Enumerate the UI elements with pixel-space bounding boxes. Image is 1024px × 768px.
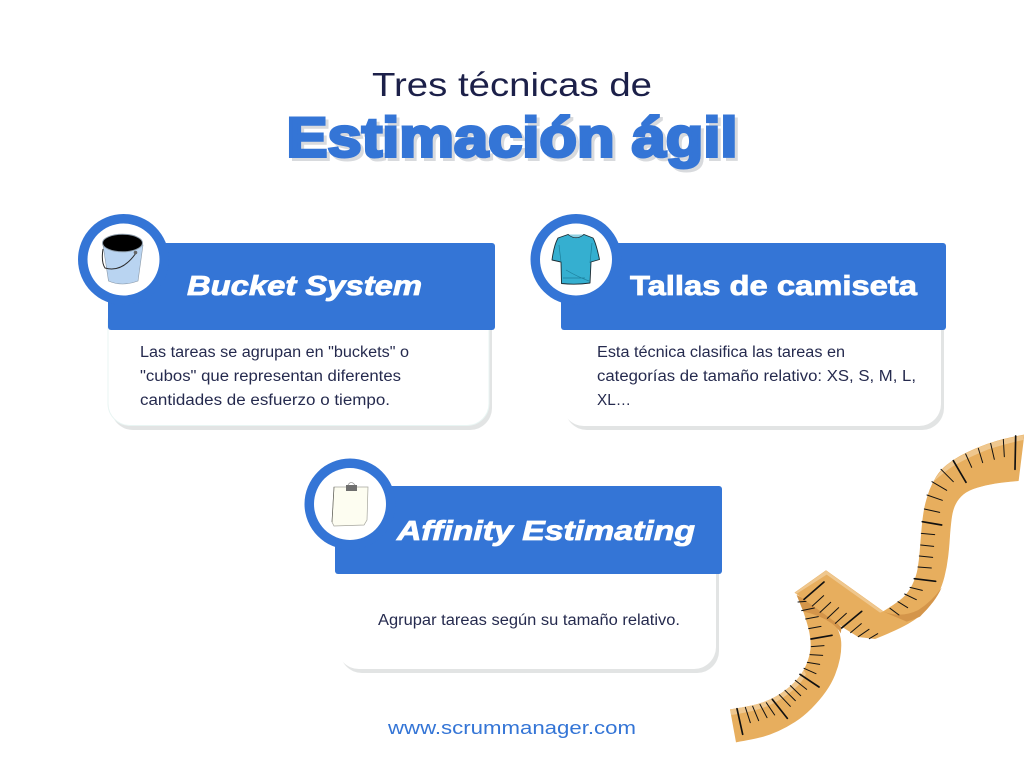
title line: Estimación ágil: Estimación ágil: [286, 106, 738, 168]
footer url: www.scrummanager.com: [387, 718, 636, 738]
description: [140, 344, 409, 409]
icon: t-shirt: [530, 214, 622, 305]
icon: note with clip: [304, 458, 396, 550]
panel: Bucket System: [78, 214, 495, 430]
lower tape section: [730, 595, 842, 742]
description: categorías de tamaño relativo: XS, S, M, L,: [597, 368, 916, 385]
card body: [108, 300, 492, 430]
heading: Bucket System: Bucket System: [187, 270, 422, 301]
description: Agrupar tareas según su tamaño relativo.: [378, 612, 680, 629]
description: Esta técnica clasifica las tareas en: [597, 344, 845, 361]
header bar: [108, 243, 495, 330]
description: Las tareas se agrupan en "buckets" o: [140, 344, 409, 361]
header bar: [335, 486, 722, 574]
title: [286, 66, 740, 172]
panel: Tallas de camiseta: [530, 214, 946, 430]
description: cantidades de esfuerzo o tiempo.: [140, 392, 390, 409]
description: [597, 344, 916, 409]
card body: [337, 545, 719, 673]
panel: Affinity Estimating: [304, 458, 722, 673]
title line: Estimación ágil: Estimación ágil: [290, 108, 740, 172]
heading: Affinity Estimating: Affinity Estimating: [396, 515, 695, 546]
header bar: [561, 243, 946, 330]
icon: bucket: [78, 214, 169, 305]
card body: [562, 300, 944, 430]
description: XL…: [597, 392, 631, 409]
heading: Tallas de camiseta: Tallas de camiseta: [630, 270, 918, 301]
description: "cubos" que representan diferentes: [140, 368, 401, 385]
upper tape section: [795, 435, 1024, 639]
measuring tape: [730, 435, 1024, 742]
title line: Tres técnicas de: Tres técnicas de: [372, 66, 652, 103]
tape tick marks: [737, 436, 1016, 734]
